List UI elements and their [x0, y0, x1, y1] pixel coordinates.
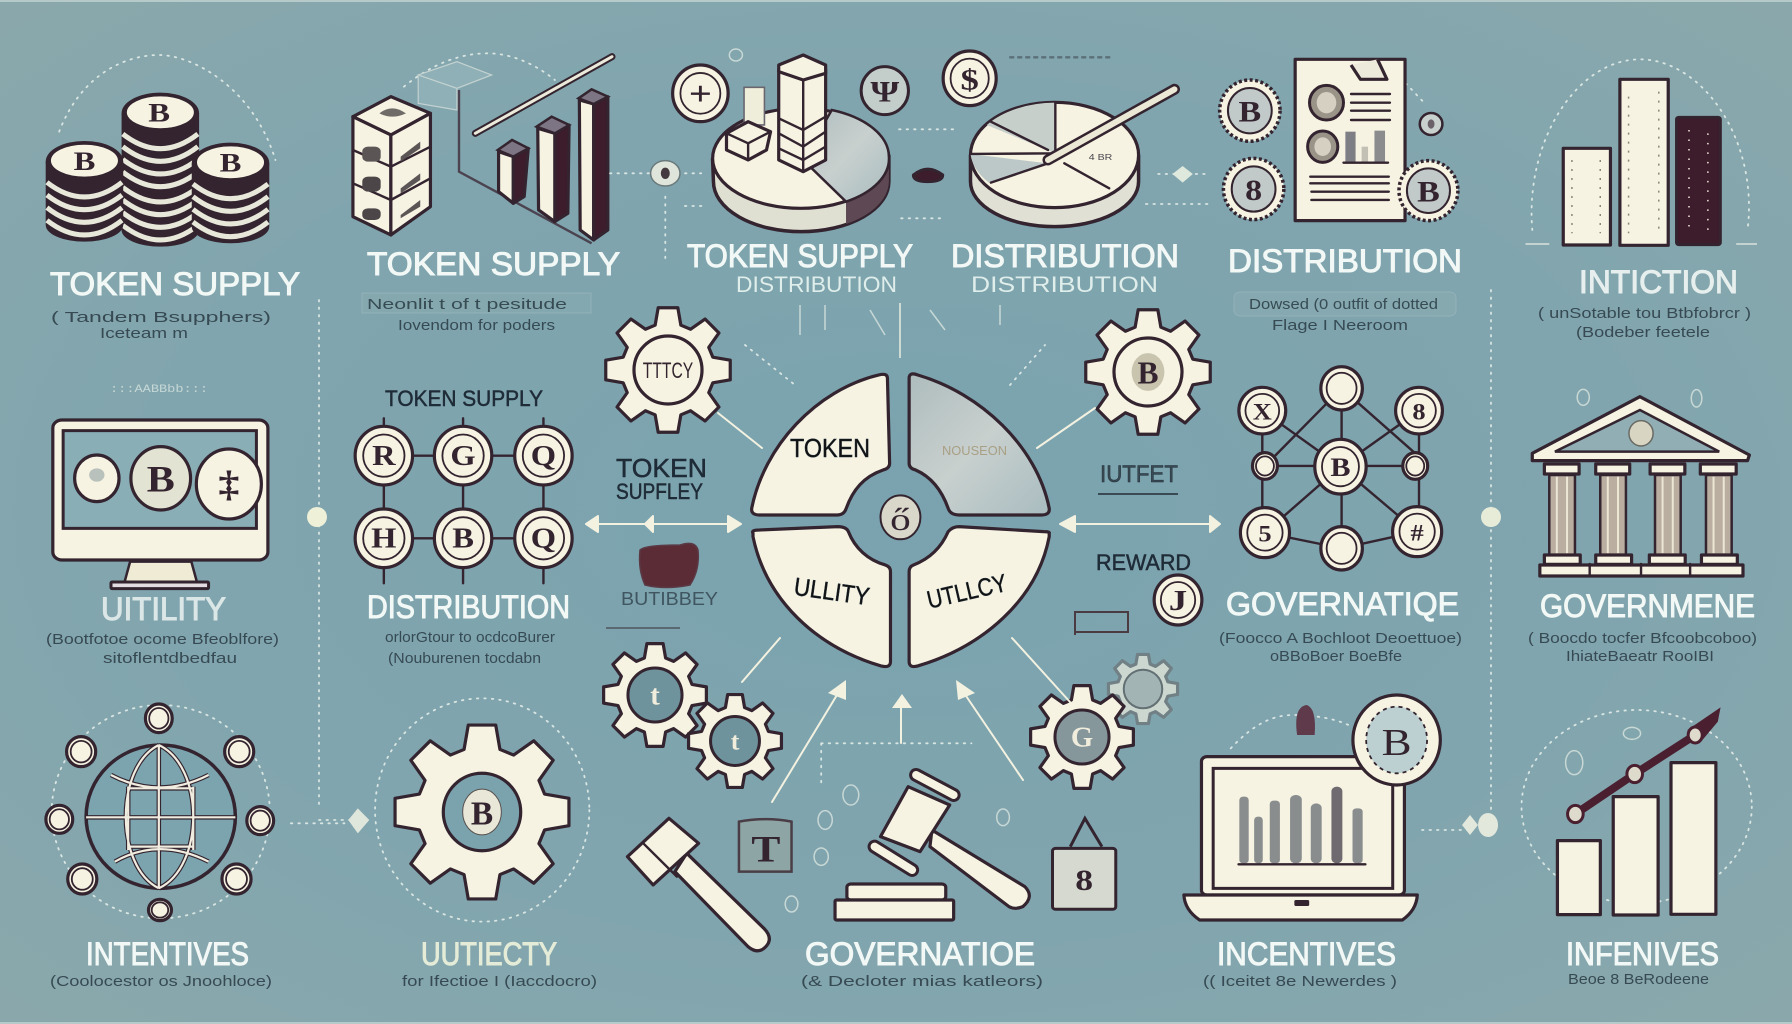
icon: bars with rising line	[1522, 707, 1752, 915]
caption line two: Iovendom for poders	[398, 317, 555, 334]
panel: incentives laptop	[1184, 695, 1498, 990]
caption line two: oBBoBoer BoeBfe	[1270, 648, 1402, 665]
panel: governance temple	[1528, 389, 1757, 665]
heading: token supply: TOKEN SUPPLY	[50, 266, 300, 302]
connector node	[640, 161, 701, 263]
caption: utility: (Bootfotoe ocome Bfeoblfore)	[46, 631, 279, 648]
panel: incentives globe	[46, 704, 274, 990]
icon: gear top right: B	[1137, 355, 1159, 390]
heading: token supply: TOKEN SUPPLY	[687, 238, 913, 274]
panel: central token wheel	[752, 374, 1049, 667]
underline	[1098, 493, 1178, 495]
icon: coin plus	[673, 65, 728, 122]
icon: gear top right	[1086, 310, 1210, 434]
wheel label: token: TOKEN	[790, 433, 870, 463]
icon: six linked coins: B	[452, 522, 474, 554]
panel: governance network	[1219, 367, 1501, 665]
caption: token supply: ( Tandem Bsupphers)	[51, 309, 271, 326]
chart: four-part wheel: ő	[890, 502, 911, 537]
caption box	[362, 293, 591, 313]
wheel label: utilcy: UTLLCY	[924, 569, 1010, 615]
arrows: connectors into the wheel	[718, 303, 1095, 802]
heading: uutiecty: UUTIECTY	[421, 936, 557, 972]
caption line two: sitoflentdbedfau	[103, 650, 237, 667]
connector node	[1481, 507, 1501, 527]
icon: node network: 8	[1412, 400, 1426, 425]
panel: token supply distribution pie	[640, 49, 956, 297]
heading: distribution: DISTRIBUTION	[951, 238, 1179, 274]
heading: intentives: INTENTIVES	[86, 936, 249, 972]
icon: three bars with arc	[1525, 59, 1757, 245]
subheading: distribution: DISTRIBUTION	[736, 272, 897, 297]
caption: bars: ( unSotable tou Btbfobrcr )	[1538, 305, 1751, 322]
wheel label: ullity: ULLITY	[792, 573, 872, 611]
icon: pie chart with pointer: 4 BR	[1089, 153, 1112, 163]
panel: distribution document	[1220, 59, 1462, 334]
icon: node network: B	[1330, 454, 1351, 483]
heading: token supply: TOKEN SUPPLY	[367, 246, 620, 282]
icon: gavel	[835, 775, 1029, 920]
icon: globe with orbiting coins	[46, 704, 274, 921]
panel: utility monitor	[46, 384, 279, 667]
connector nodes	[1462, 813, 1498, 837]
subheading: distribution: DISTRIBUTION	[971, 272, 1158, 297]
label: supply: SUPFLEY	[616, 479, 703, 504]
panel: inflation bars	[1525, 59, 1757, 341]
icon: gear pair lower right	[1031, 654, 1178, 788]
icon: gear titled ttcy: TTTCY	[643, 358, 693, 383]
icon: coin stacks: B	[74, 147, 95, 176]
icon: coin stacks: B	[220, 148, 242, 178]
icon: maroon marker	[913, 166, 1205, 183]
icon: gear titled ttcy	[606, 308, 730, 432]
icon: coin stacks: B	[148, 98, 170, 128]
label: token supply: TOKEN SUPPLY	[385, 386, 543, 411]
arrow: double headed right	[1060, 516, 1220, 532]
icon: grey coin	[861, 67, 908, 115]
icon: six linked coins: G	[450, 440, 476, 471]
callout: token supply arrow	[586, 453, 741, 532]
heading: distribution: DISTRIBUTION	[367, 589, 570, 625]
icon: gear pair lower left: t	[731, 726, 740, 755]
icon: coin stacks	[46, 55, 275, 247]
panel: incentives growth bars	[1522, 707, 1752, 988]
callout: reward	[1075, 550, 1202, 635]
heading: intiction: INTICTION	[1579, 264, 1738, 300]
heading: utility: UITILITY	[101, 591, 226, 627]
label: lutfet: IUTFET	[1100, 461, 1178, 488]
caption line two: Flage I Neeroom	[1272, 317, 1408, 334]
icon: large gear	[291, 698, 589, 922]
caption line two: (Bodeber feetele	[1576, 324, 1710, 341]
icon: monitor with coins: ‡	[218, 464, 239, 505]
connector node	[307, 507, 327, 527]
icon: seal one	[1220, 80, 1280, 141]
icon: seal two: 8	[1245, 173, 1262, 207]
icon: node network: X	[1253, 400, 1272, 425]
caption line two: Iceteam m	[100, 325, 188, 342]
icon: pie chart with pointer	[970, 57, 1209, 227]
panel: distribution pie	[913, 51, 1209, 297]
heading: governatiqe: GOVERNATIQE	[1226, 586, 1459, 622]
icon: monitor with coins: B	[147, 459, 175, 500]
icon: gear with coin centre: B	[471, 795, 493, 832]
callout: lutfet arrow	[1060, 461, 1220, 532]
icon: reward coin: J	[1169, 586, 1187, 617]
caption: gear: for Ifectioe I (Iaccdocro)	[402, 973, 597, 990]
icon: grey coin: Ψ	[870, 76, 900, 109]
panel: token supply coin stacks	[46, 55, 300, 342]
chart: four-part wheel	[752, 374, 1049, 667]
caption: growth bars: Beoe 8 BeRodeene	[1568, 971, 1709, 988]
heading: incentives: INCENTIVES	[1217, 936, 1396, 972]
caption: temple: ( Boocdo tocfer Bfcoobcoboo)	[1528, 630, 1757, 647]
caption: laptop: (( Iceitet 8e Newerdes )	[1203, 973, 1397, 990]
icon: document with seals	[1295, 59, 1442, 221]
panel: utility gear	[291, 698, 597, 990]
faint top note: :::AABBbb:::	[110, 384, 208, 396]
icon: monitor with coins	[53, 420, 268, 589]
icon: six linked coins	[355, 418, 572, 583]
icon: six linked coins: H	[371, 522, 397, 554]
label: token: TOKEN	[616, 453, 707, 483]
icon: gear pair lower left	[604, 644, 781, 787]
icon: seal one: B	[1239, 95, 1261, 128]
icon: bitcoin coin: B	[1382, 722, 1412, 764]
wheel label: muted: NOUSEON	[942, 443, 1007, 458]
icon: token tag: T	[751, 829, 781, 870]
icon: key line	[606, 627, 680, 629]
heading: governmene: GOVERNMENE	[1540, 588, 1755, 624]
icon: six linked coins: R	[372, 440, 397, 471]
icon: gear pair lower right: G	[1071, 722, 1093, 753]
icon: seal two	[1223, 158, 1284, 220]
icon: gear with coin centre	[395, 725, 569, 899]
icon: node network: #	[1411, 521, 1424, 546]
icon: seal three: B	[1417, 175, 1440, 208]
icon: temple	[1532, 389, 1749, 576]
caption box	[1234, 292, 1456, 316]
icon: node network: 5	[1258, 522, 1272, 547]
panel: token supply cubes and bars	[353, 53, 640, 334]
icon: maroon badge	[640, 543, 698, 588]
label: butibbey: BUTIBBEY	[621, 589, 718, 609]
icon: pie chart with tower	[685, 49, 956, 232]
caption: grid: orlorGtour to ocdcoBurer	[385, 629, 555, 646]
icon: padlock: 8	[1075, 864, 1093, 897]
label: reward: REWARD	[1096, 550, 1191, 575]
caption line two: (Nouburenen tocdabn	[388, 650, 541, 667]
caption: gavel: (& Decloter mias katleors)	[801, 973, 1043, 990]
icon: coin top left	[943, 51, 996, 106]
icon: six linked coins: Q	[531, 522, 556, 554]
caption: globe: (Coolocestor os Jnoohloce)	[50, 973, 272, 990]
icon: bitcoin coin	[1353, 695, 1440, 785]
icon: node network	[1239, 367, 1442, 570]
caption: cubes: Neonlit t of t pesitude	[367, 296, 567, 313]
callout: butterfly icon and key	[606, 543, 718, 628]
heading: infenives: INFENIVES	[1566, 936, 1719, 972]
icon: laptop with chart	[1184, 705, 1417, 920]
panel: governance gavel	[627, 743, 1116, 990]
heading: governatioe: GOVERNATIOE	[805, 936, 1035, 972]
caption line two: IhiateBaeatr RooIBI	[1566, 648, 1714, 665]
icon: gear pair lower left: t	[650, 680, 660, 711]
heading: distribution: DISTRIBUTION	[1228, 243, 1462, 279]
caption: network: (Foocco A Bochloot Deoettuoe)	[1219, 630, 1462, 647]
icon: coin top left: $	[960, 63, 979, 96]
icon: seal three	[1399, 161, 1458, 221]
icon: token tag	[739, 819, 792, 872]
caption: document: Dowsed (0 outfit of dotted	[1249, 296, 1438, 313]
icon: six linked coins: Q	[531, 440, 556, 471]
icon: hammer	[627, 743, 1009, 951]
icon: coin plus: +	[689, 76, 712, 113]
arrow: double headed left	[586, 516, 741, 532]
panel: distribution coin grid	[307, 386, 572, 667]
icon: reward frame	[1075, 612, 1128, 635]
icon: padlock	[1053, 818, 1116, 909]
icon: cube tower and rising bars	[353, 53, 640, 243]
